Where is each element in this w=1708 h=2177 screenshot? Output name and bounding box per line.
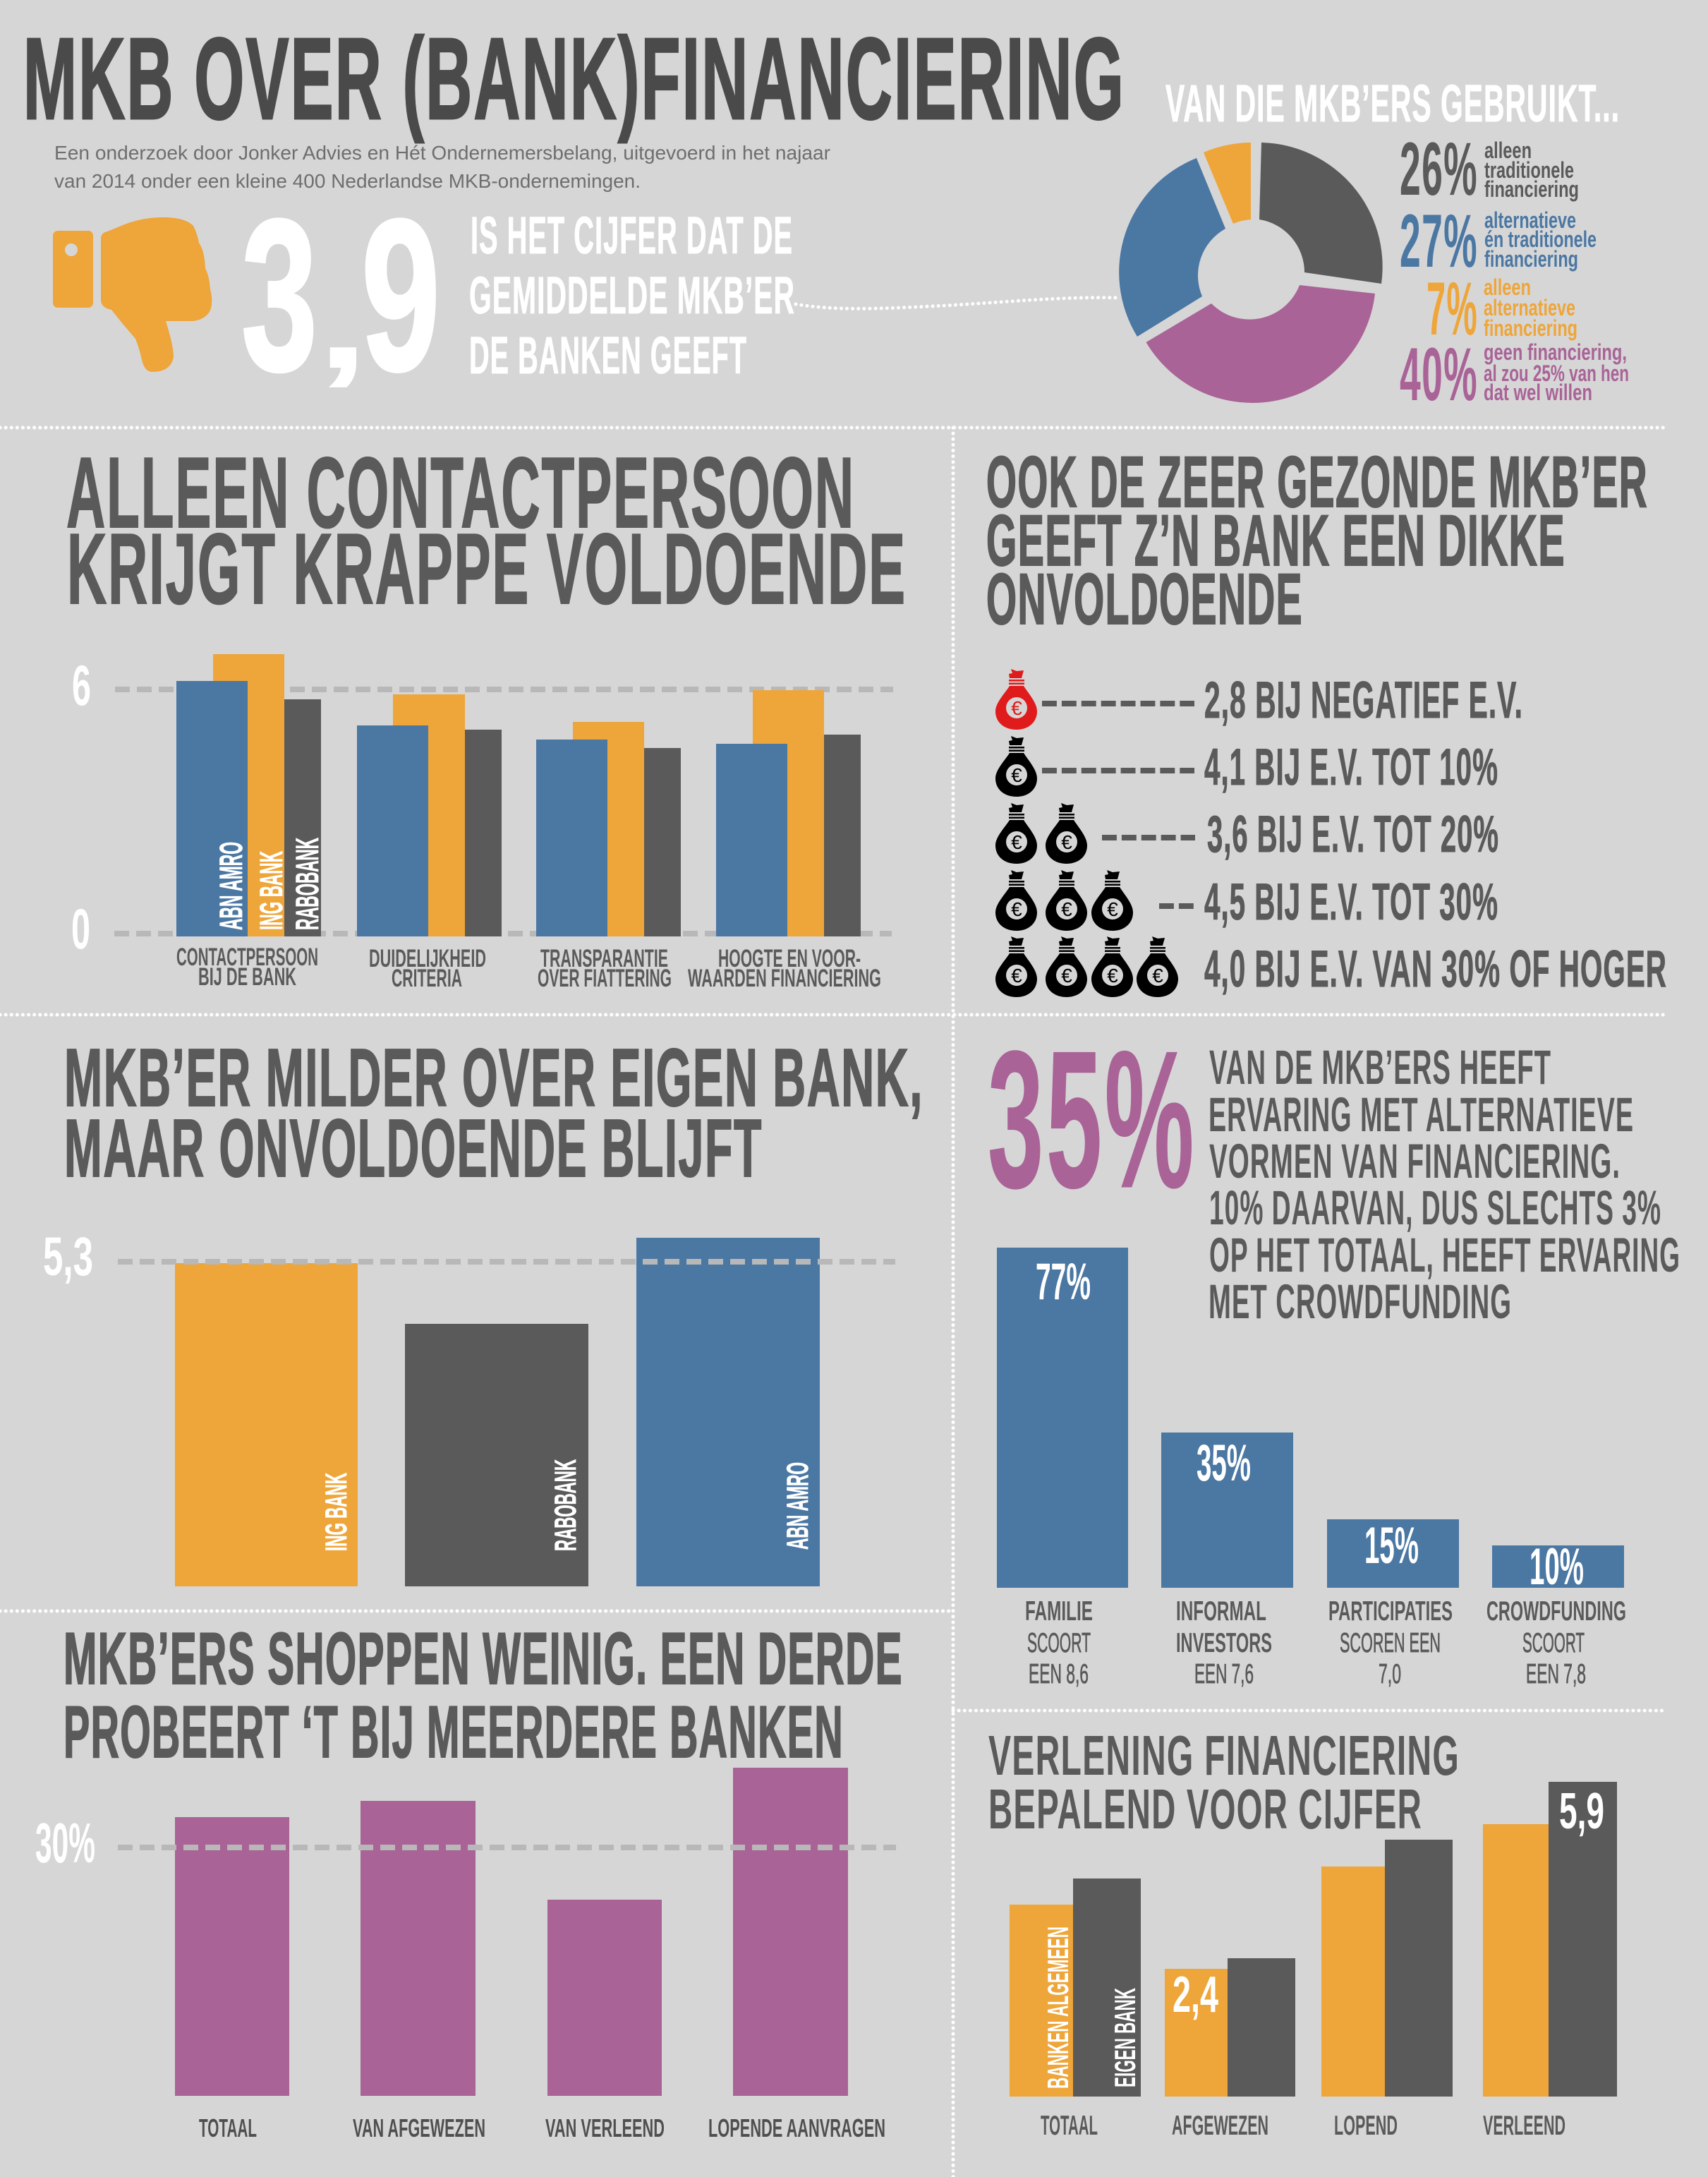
category labels: DUIDELIJKHEID	[369, 945, 486, 972]
legend: 26%: traditionele	[1484, 157, 1574, 183]
label: participaties: PARTICIPATIES	[1328, 1596, 1453, 1627]
row: e.v. van 30% of hoger	[995, 936, 1667, 998]
icons: four money bags	[995, 936, 1178, 997]
bar chart: shopping percentages	[35, 1768, 896, 2142]
heading: zeer gezonde mkb'er: ONVOLDOENDE	[986, 559, 1303, 639]
text: alternative financing	[1209, 1040, 1680, 1329]
bar: van afgewezen	[361, 1801, 476, 2096]
bar chart: banks on four criteria: RABOBANK	[289, 838, 325, 930]
bar: familie: 77%	[1036, 1253, 1091, 1310]
icons: two money bags	[995, 803, 1087, 864]
bar: familie	[997, 1248, 1128, 1588]
label: participaties: 7,0	[1379, 1659, 1401, 1689]
big score 3,9: ,	[319, 253, 367, 394]
score statement: GEMIDDELDE MKB’ER	[469, 266, 795, 325]
label: informal investors: INFORMAL	[1176, 1596, 1266, 1627]
icons: four money bags: €	[1107, 965, 1118, 987]
icons: three money bags: €	[1107, 898, 1118, 920]
series labels: EIGEN BANK	[1108, 1988, 1141, 2087]
legend: 27%: alternatieve	[1484, 207, 1576, 233]
big score 3,9	[241, 174, 440, 416]
series labels: ING BANK	[253, 851, 289, 930]
bars: hoogte en voorwaarden	[716, 690, 861, 936]
label: familie: FAMILIE	[1025, 1596, 1093, 1627]
bars: duidelijkheid	[357, 694, 502, 936]
bar chart: alternative financing forms	[997, 1248, 1626, 1689]
bar: crowdfunding: 10%	[1530, 1538, 1584, 1596]
category labels: LOPENDE AANVRAGEN	[708, 2113, 885, 2142]
category labels: TRANSPARANTIE	[540, 945, 668, 972]
heading: shoppen: PROBEERT ‘T BIJ MEERDERE BANKEN	[63, 1691, 844, 1773]
heading: shoppen: MKB’ERS SHOPPEN WEINIG. EEN DERDE	[63, 1618, 903, 1700]
big score 3,9: 3	[241, 174, 317, 416]
label: participaties	[1328, 1596, 1453, 1689]
category labels: AFGEWEZEN	[1172, 2111, 1268, 2141]
legend: 26%: alleen	[1484, 138, 1532, 163]
icon: thumbs down	[53, 217, 212, 372]
legend: 27%: 27%	[1400, 198, 1478, 283]
heading: contactpersoon	[66, 437, 907, 625]
bars: lopend	[1321, 1840, 1453, 2097]
heading: shoppen	[63, 1618, 903, 1773]
big number 35%: 35%	[988, 1010, 1197, 1229]
category labels: VERLEEND	[1483, 2111, 1565, 2141]
legend: 26%: financiering	[1484, 176, 1579, 202]
bar chart: banks on four criteria	[71, 654, 893, 992]
legend: 7%: alternatieve	[1484, 295, 1575, 320]
category labels: OVER FIATTERING	[538, 965, 672, 992]
icons: two money bags: €	[1061, 831, 1072, 853]
category labels	[1041, 2111, 1565, 2141]
legend: 40%: al zou 25% van hen	[1484, 361, 1629, 386]
icons: two money bags: €	[1011, 831, 1022, 853]
label: informal investors: INVESTORS	[1176, 1628, 1272, 1658]
bars: contactpersoon	[176, 654, 321, 936]
heading: verlening financiering: BEPALEND VOOR CIJFER	[988, 1778, 1422, 1840]
bar: ABN AMRO	[636, 1238, 820, 1586]
series labels	[1041, 1926, 1141, 2089]
bar: ING	[175, 1263, 358, 1586]
legend: 27%: én traditionele	[1484, 227, 1597, 252]
axis label 6: 6	[72, 654, 91, 718]
big score 3,9: 9	[361, 174, 440, 416]
bank labels	[320, 1459, 815, 1551]
bar: van verleend	[547, 1900, 662, 2096]
bar: lopende aanvragen	[733, 1768, 848, 2096]
label: crowdfunding	[1486, 1596, 1626, 1689]
label: informal investors	[1176, 1596, 1272, 1689]
bars: afgewezen	[1165, 1958, 1295, 2097]
series labels	[213, 838, 325, 930]
intro text: Een onderzoek door Jonker Advies en Hét Ondernemersbelang, uitgevoerd in het najaar	[54, 142, 830, 164]
bar: crowdfunding	[1492, 1538, 1624, 1596]
row: e.v. tot 10%	[995, 736, 1498, 797]
bars: verleend	[1483, 1782, 1617, 2097]
icons: three money bags	[995, 870, 1133, 931]
heading: contactpersoon: ALLEEN CONTACTPERSOON	[66, 437, 855, 549]
bars: transparantie	[536, 722, 681, 936]
bar: informal investors: 35%	[1197, 1435, 1251, 1492]
category labels: BIJ DE BANK	[198, 963, 296, 991]
icon: red money bag	[995, 669, 1037, 730]
category labels: VAN AFGEWEZEN	[353, 2113, 485, 2142]
label: familie: EEN 8,6	[1029, 1659, 1089, 1689]
icons: four money bags: €	[1152, 965, 1163, 987]
intro text	[54, 142, 830, 192]
heading: verlening financiering	[988, 1724, 1460, 1840]
legend: 40%: geen financiering,	[1484, 339, 1627, 365]
category labels: TOTAAL	[199, 2113, 257, 2142]
category labels: HOOGTE EN VOOR-	[718, 945, 861, 972]
legend: 40%	[1400, 332, 1629, 416]
legend: 7%: 7%	[1427, 266, 1478, 351]
axis label 30%: 30%	[35, 1811, 95, 1874]
legend: 7%: financiering	[1484, 315, 1577, 341]
label: crowdfunding: EEN 7,8	[1526, 1659, 1586, 1689]
score statement: DE BANKEN GEEFT	[469, 326, 747, 385]
row: e.v. tot 30%	[995, 870, 1498, 931]
category labels	[199, 2113, 885, 2142]
bar: participaties: 15%	[1364, 1517, 1419, 1574]
category labels: TOTAAL	[1041, 2111, 1098, 2141]
category labels	[176, 943, 881, 992]
value 2,4: 2,4	[1173, 1967, 1218, 2023]
bar chart: own bank	[43, 1226, 895, 1586]
connector: dotted line to donut	[796, 298, 1118, 308]
legend: 26%: 26%	[1400, 126, 1478, 211]
icons: four money bags: €	[1011, 965, 1022, 987]
heading: milder over eigen bank: MKB’ER MILDER OVER EIGEN BANK,	[64, 1032, 923, 1123]
heading: milder over eigen bank: MAAR ONVOLDOENDE BLIJFT	[64, 1102, 763, 1194]
bar: Rabobank	[405, 1324, 588, 1586]
label: crowdfunding: SCOORT	[1522, 1628, 1585, 1658]
series labels: ABN AMRO	[213, 842, 249, 930]
bank labels: RABOBANK	[549, 1459, 583, 1551]
bar chart: banks vs own bank	[1010, 1782, 1617, 2141]
bank labels: ING BANK	[320, 1473, 353, 1551]
heading: contactpersoon: KRIJGT KRAPPE VOLDOENDE	[67, 513, 907, 625]
category labels: LOPEND	[1334, 2111, 1398, 2141]
bars: totaal	[1010, 1879, 1141, 2097]
legend: 7%: alleen	[1484, 275, 1531, 300]
axis label 0: 0	[71, 898, 90, 961]
bar: informal investors	[1161, 1433, 1293, 1588]
category labels: WAARDEN FINANCIERING	[688, 965, 881, 992]
legend: 40%: 40%	[1400, 332, 1478, 416]
label: familie: SCOORT	[1027, 1628, 1091, 1658]
donut chart	[1119, 143, 1383, 403]
label: informal investors: EEN 7,6	[1194, 1659, 1254, 1689]
heading: zeer gezonde mkb'er	[986, 442, 1648, 639]
score statement: IS HET CIJFER DAT DE	[471, 206, 793, 265]
legend: 40%: dat wel willen	[1484, 380, 1592, 405]
icon: money bag: €	[1011, 764, 1022, 786]
label: familie	[1025, 1596, 1093, 1689]
series labels: BANKEN ALGEMEEN	[1041, 1926, 1074, 2089]
label: participaties: SCOREN EEN	[1340, 1628, 1441, 1658]
heading: milder over eigen bank	[64, 1032, 923, 1194]
icons: three money bags: €	[1061, 898, 1072, 920]
icons: three money bags: €	[1011, 898, 1022, 920]
bar: participaties	[1327, 1517, 1459, 1588]
bar: totaal	[175, 1817, 289, 2096]
bank labels: ABN AMRO	[781, 1462, 815, 1550]
icons: four money bags: €	[1061, 965, 1072, 987]
axis label 5,3: 5,3	[43, 1226, 93, 1287]
icon: red money bag: €	[1011, 697, 1022, 719]
intro text: van 2014 onder een kleine 400 Nederlandse MKB-ondernemingen.	[54, 170, 641, 192]
category labels: VAN VERLEEND	[545, 2113, 665, 2142]
category labels: CONTACTPERSOON	[176, 943, 318, 971]
value 5,9: 5,9	[1559, 1783, 1604, 1840]
score statement	[469, 206, 795, 385]
category labels: CRITERIA	[392, 965, 462, 992]
row: negatief eigen vermogen	[995, 669, 1523, 730]
row: e.v. tot 20%	[995, 803, 1499, 864]
icon: money bag	[995, 736, 1037, 797]
legend: 27%: financiering	[1484, 246, 1578, 272]
